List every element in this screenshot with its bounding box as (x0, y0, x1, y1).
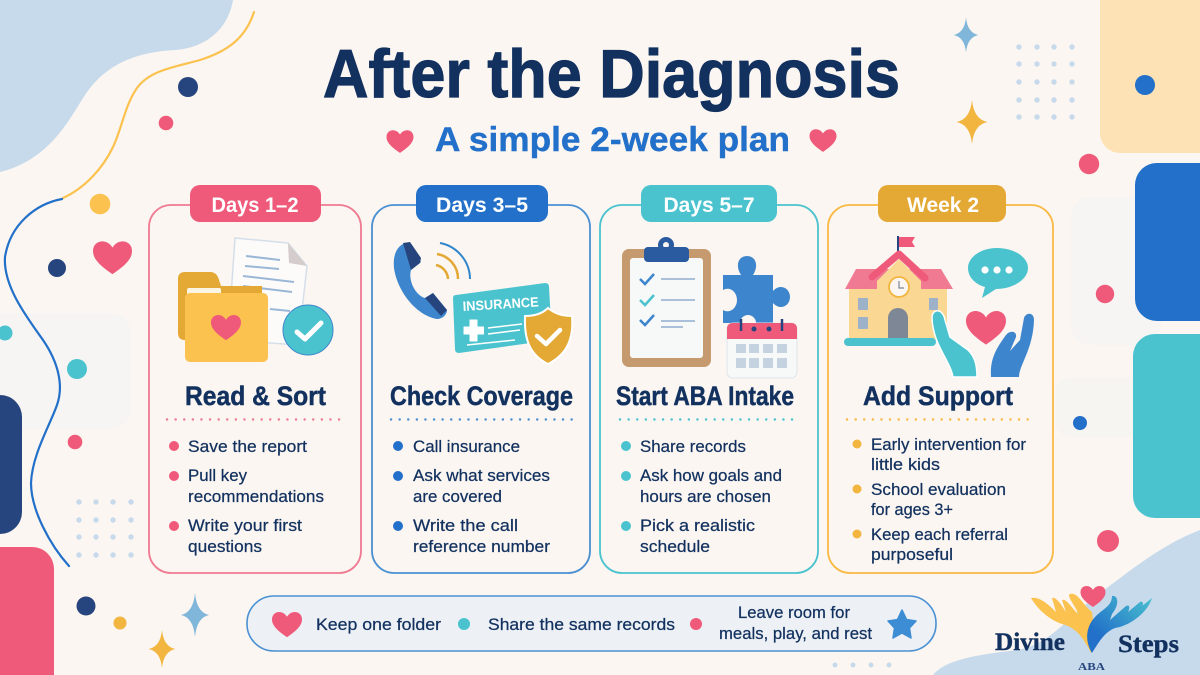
card heading: Check Coverage (390, 381, 573, 411)
badge: Days 3-5 (416, 185, 548, 222)
bullet list (169, 437, 324, 556)
bullet list: Share records (640, 437, 746, 456)
logo: Divine Steps ABA: Steps (1118, 631, 1179, 658)
bullet list: Save the report (188, 437, 307, 456)
panel: Days 1-2 Read & Sort (149, 185, 361, 573)
bullet list: little kids (871, 455, 940, 474)
reminder: leave room: meals, play, and rest (719, 624, 872, 643)
bullet list: Pick a realistic (640, 516, 756, 535)
icon: left heart (93, 241, 132, 274)
badge: Week 2 (878, 185, 1006, 222)
icon: subtitle heart left (386, 130, 414, 153)
bullet list: Ask how goals and (640, 466, 782, 485)
card heading: Read & Sort (185, 381, 326, 411)
icon: footer heart (272, 612, 302, 637)
icon: yellow sparkle top right (956, 100, 988, 144)
card heading: Start ABA Intake (616, 381, 794, 411)
icon: star (888, 610, 916, 638)
bullet list: purposeful (871, 545, 953, 564)
reminder: share records: Share the same records (488, 615, 675, 634)
logo: Divine Steps ABA: Divine (995, 629, 1065, 656)
bullet list: Ask what services (413, 466, 550, 485)
badge: Days 5-7 (641, 185, 777, 222)
icon: subtitle heart right (810, 129, 836, 152)
panel: Days 3-5 Check Coverage (372, 185, 590, 573)
bullet list: Call insurance (413, 437, 520, 456)
badge: Days 1-2 (190, 185, 321, 222)
bullet list: for ages 3+ (871, 500, 953, 519)
dotted divider (620, 418, 800, 421)
bullet list: Keep each referral (871, 525, 1008, 544)
card heading: Add Support (863, 381, 1013, 411)
bullet list (621, 437, 782, 556)
bullet list: Write your first (188, 516, 302, 535)
icon: phone and insurance card with shield (394, 242, 572, 364)
reminder: leave room (719, 603, 872, 643)
icon: blue sparkle top right (954, 18, 978, 52)
icon: phone and insurance card with shield: INSURANCE (462, 294, 539, 314)
badge: Days 1-2: Days 1–2 (212, 194, 298, 217)
badge: Week 2: Week 2 (907, 194, 979, 217)
bullet list: questions (188, 537, 262, 556)
footer reminder bar (247, 596, 936, 651)
dotted divider (167, 418, 344, 421)
bullet list: hours are chosen (640, 487, 771, 506)
title: After the Diagnosis (323, 36, 900, 112)
bullet list: Write the call (413, 516, 518, 535)
subtitle: A simple 2-week plan (435, 121, 790, 159)
dotted divider (391, 418, 573, 421)
panel: Week 2 Add Support (828, 185, 1053, 573)
bullet list (393, 437, 550, 556)
icon: folder with document and check (178, 238, 333, 362)
dotted divider (847, 418, 1036, 421)
badge: Days 3-5: Days 3–5 (436, 194, 528, 217)
icon: clipboard, puzzle piece and calendar (622, 237, 797, 378)
teal dot (458, 618, 470, 630)
reminder: leave room: Leave room for (738, 603, 850, 622)
bullet list: School evaluation (871, 480, 1006, 499)
logo: Divine Steps ABA (995, 586, 1179, 673)
bullet list: recommendations (188, 487, 324, 506)
bullet list: schedule (640, 537, 710, 556)
bullet list: reference number (413, 537, 550, 556)
bullet list: Pull key (188, 466, 247, 485)
badge: Days 5-7: Days 5–7 (664, 194, 754, 217)
panel: Days 5-7 Start ABA Intake (600, 185, 818, 573)
icon: school, speech bubble, hands and heart (844, 236, 1034, 377)
bullet list: are covered (413, 487, 502, 506)
icon: blue sparkle bottom left (181, 593, 209, 637)
bullet list (852, 435, 1026, 564)
icon: yellow sparkle bottom left (148, 630, 176, 668)
logo: Divine Steps ABA: ABA (1078, 661, 1105, 673)
reminder: keep one folder: Keep one folder (316, 615, 441, 634)
bullet list: Early intervention for (871, 435, 1026, 454)
pink dot (690, 618, 702, 630)
